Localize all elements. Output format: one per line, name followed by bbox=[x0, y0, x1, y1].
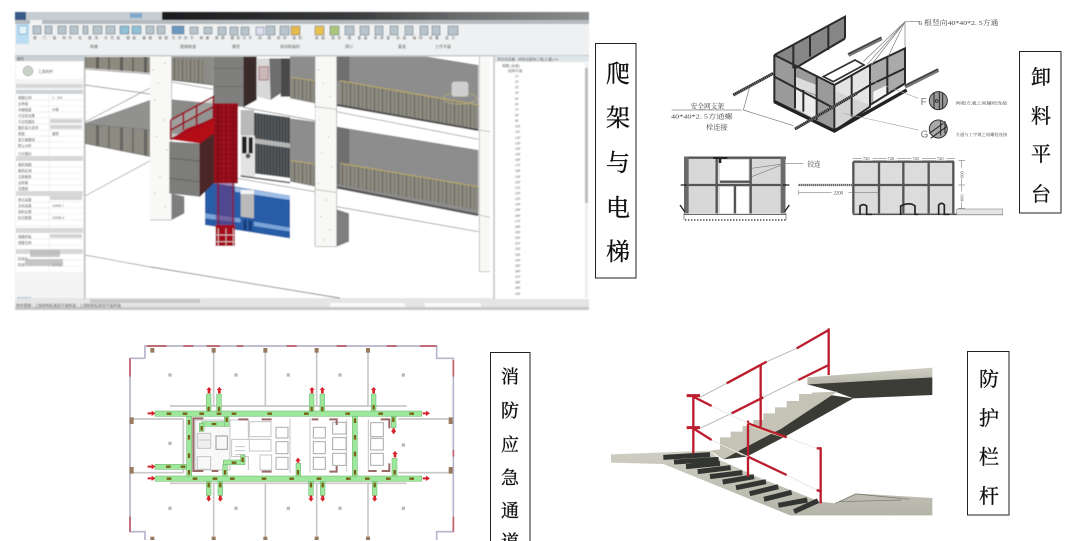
detail G bbox=[843, 113, 1007, 141]
project browser panel: 33F bbox=[515, 253, 521, 257]
room tags bbox=[168, 373, 405, 510]
ribbon toolbar: 房间和面积 bbox=[280, 43, 300, 49]
label: 消防应急通道: 急 bbox=[501, 468, 520, 488]
gray climbing frame box bbox=[169, 142, 199, 197]
project browser panel: 35F bbox=[515, 264, 521, 268]
label: 防护栏杆 bbox=[968, 352, 1009, 515]
label: 爬架与电梯: 架 bbox=[606, 105, 630, 132]
side elevation with dimensions: 720 bbox=[912, 156, 919, 161]
side elevation with dimensions: 600 bbox=[959, 194, 964, 201]
project browser panel: 27F bbox=[515, 219, 521, 223]
properties palette: 裁剪区域 bbox=[18, 168, 32, 173]
ribbon toolbar: 模型 bbox=[232, 43, 240, 49]
project browser panel: 26F bbox=[515, 214, 521, 218]
properties palette: 14990.7 bbox=[52, 204, 64, 208]
label: 卸料平台: 台 bbox=[1031, 183, 1051, 206]
project browser panel: 3F bbox=[515, 86, 519, 90]
properties palette: 视图名称 bbox=[18, 240, 32, 245]
properties palette: 阶段化 bbox=[18, 256, 29, 261]
project browser panel: 28F bbox=[515, 225, 521, 229]
side elevation with dimensions bbox=[799, 156, 1003, 215]
label: 卸料平台: 平 bbox=[1031, 143, 1051, 166]
label: 防护栏杆: 护 bbox=[979, 407, 999, 430]
properties palette: 图形显示选项 bbox=[18, 125, 39, 130]
project browser panel: 20F bbox=[515, 180, 521, 184]
label: 防护栏杆: 防 bbox=[979, 368, 999, 391]
project browser panel: 1F bbox=[515, 74, 519, 78]
red hoist tower bbox=[214, 103, 238, 183]
front elevation: 铰连 bbox=[807, 160, 821, 169]
project browser panel: 5F bbox=[515, 97, 519, 101]
properties palette: 属性帮助 bbox=[17, 296, 32, 301]
status bar bbox=[15, 298, 589, 310]
label: 消防应急通道: 消 bbox=[501, 367, 519, 387]
project browser panel: 29F bbox=[515, 230, 521, 234]
far wall upper bays bbox=[172, 57, 213, 85]
project browser panel: 4F bbox=[515, 91, 519, 95]
left bay walls and railings bbox=[85, 57, 340, 298]
detail G: 方通与工字钢之间螺栓连接 bbox=[956, 131, 1007, 137]
properties palette: 视图比例 bbox=[18, 95, 32, 100]
leader lines bbox=[863, 22, 920, 65]
project browser panel: 22F bbox=[515, 192, 521, 196]
project browser panel: 36F bbox=[515, 270, 521, 274]
detail F bbox=[870, 80, 1007, 110]
label: 爬架与电梯: 与 bbox=[606, 150, 630, 177]
side elevation with dimensions: 720 bbox=[888, 156, 894, 161]
properties palette: 详细程度 bbox=[18, 107, 32, 112]
project browser panel: 37F bbox=[515, 275, 521, 279]
ribbon toolbar: 工作平面 bbox=[435, 43, 451, 49]
label: 防护栏杆: 杆 bbox=[979, 485, 999, 508]
properties palette: 19568.0 bbox=[52, 216, 64, 220]
side elevation with dimensions: 600 bbox=[959, 171, 964, 178]
ribbon toolbar: 洞口 bbox=[345, 43, 353, 49]
detail G: G bbox=[921, 130, 929, 141]
ribbon toolbar: 按面 竖井 墙 垂直 老虎窗 标高 轴网 设置 显示 bbox=[315, 35, 455, 40]
properties palette: 相机位置 bbox=[18, 209, 32, 214]
properties palette: 日光路径 bbox=[18, 151, 32, 156]
project browser panel: 17F bbox=[515, 164, 521, 168]
properties palette: 注释裁剪 bbox=[18, 174, 32, 179]
project browser panel bbox=[493, 56, 589, 299]
properties palette: 规程 bbox=[18, 131, 25, 136]
callout: safety net bracket: 栓连接 bbox=[706, 122, 728, 131]
red exit arrows bbox=[148, 387, 430, 502]
red guard rails bbox=[687, 328, 829, 503]
properties palette: 范围框 bbox=[18, 186, 29, 191]
project browser panel: 40F bbox=[515, 292, 521, 296]
gray shaft and cabin bbox=[213, 57, 243, 107]
properties palette: 属性 bbox=[17, 56, 25, 61]
properties palette: 1 : 100 bbox=[52, 96, 62, 100]
callout: safety net bracket bbox=[671, 102, 742, 131]
properties palette: 目标高度 bbox=[18, 203, 32, 208]
properties palette: 新构造 bbox=[52, 262, 63, 267]
blue translucent lower frame bbox=[205, 182, 290, 238]
ribbon toolbar: 构建 bbox=[90, 43, 98, 49]
label: 爬架与电梯: 爬 bbox=[606, 61, 630, 88]
project browser panel: 结构平面 bbox=[508, 68, 523, 73]
upper landing and stair flight bbox=[710, 368, 932, 459]
project browser panel: 19F bbox=[515, 175, 521, 179]
ribbon toolbar: 楼梯坡道 bbox=[180, 43, 196, 49]
red cage platform bbox=[171, 118, 214, 143]
project browser panel: 38F bbox=[515, 281, 521, 285]
window title bar bbox=[15, 12, 589, 20]
panel: stair guard railing model bbox=[611, 328, 932, 515]
project browser panel: 16F bbox=[515, 158, 521, 162]
isometric platform bbox=[733, 17, 938, 131]
callout: 6 square tubes: 6 根竖向40*40*2. 5方通 bbox=[918, 18, 999, 27]
properties palette: 可见性图形 bbox=[18, 119, 36, 124]
properties palette: 标识数据 bbox=[18, 215, 32, 220]
3D viewport: building model bbox=[84, 56, 494, 299]
label: 爬架与电梯 bbox=[596, 44, 636, 278]
project browser panel: 8F bbox=[515, 114, 519, 118]
detail F: 两根方通之间螺栓连接 bbox=[956, 99, 1007, 105]
building outline bbox=[130, 346, 453, 540]
project browser panel: 30F bbox=[515, 236, 521, 240]
panel: Revit screenshot of climbing frame and elevator bbox=[15, 12, 589, 310]
properties palette: 阶段 bbox=[18, 262, 25, 267]
side elevation with dimensions: 2200 bbox=[834, 192, 844, 197]
project browser panel: 31F bbox=[515, 242, 521, 246]
label: 卸料平台 bbox=[1020, 52, 1061, 213]
properties palette: 视点高度 bbox=[18, 197, 32, 202]
label: 卸料平台: 料 bbox=[1031, 105, 1051, 128]
project browser panel: 32F bbox=[515, 247, 521, 251]
project browser panel: 21F bbox=[515, 186, 521, 190]
columns bbox=[315, 57, 337, 247]
callout: safety net bracket: 40*40*2. 5方通螺 bbox=[671, 112, 734, 121]
ribbon toolbar: 基准 bbox=[398, 43, 406, 49]
project browser panel: 34F bbox=[515, 258, 521, 262]
project browser panel: 15F bbox=[515, 152, 521, 156]
project browser panel: 7F bbox=[515, 108, 519, 112]
project browser panel: 项目浏览器 - 地铁站装饰工程(土建).rvt bbox=[497, 56, 558, 62]
structural columns bbox=[130, 348, 453, 540]
label: 消防应急通道: 应 bbox=[501, 435, 519, 455]
label: 爬架与电梯: 电 bbox=[606, 195, 630, 222]
project browser panel: 23F bbox=[515, 197, 521, 201]
project browser panel: 25F bbox=[515, 208, 521, 212]
label: 爬架与电梯: 梯 bbox=[606, 239, 630, 266]
label: 防护栏杆: 栏 bbox=[979, 446, 999, 469]
panel: unloading platform drawings bbox=[671, 17, 1007, 220]
mid bays bbox=[337, 127, 478, 215]
viewcube bbox=[443, 82, 477, 104]
label: 消防应急通道: 通 bbox=[501, 501, 519, 521]
properties palette: 远剪裁 bbox=[18, 180, 29, 185]
status bar: 构件楼梯 : 上部结构标准层平面构造 : 上部结构标准层平面构造 bbox=[16, 303, 121, 308]
project browser panel: 12F bbox=[515, 136, 521, 140]
project browser panel: 6F bbox=[515, 102, 519, 106]
callout: safety net bracket: 安全网支架 bbox=[691, 102, 724, 111]
panel: fire emergency route floor plan bbox=[130, 346, 453, 540]
project browser panel: 14F bbox=[515, 147, 521, 151]
label: 消防应急通道 bbox=[490, 352, 530, 541]
properties palette: 可见性设置 bbox=[18, 113, 36, 118]
properties palette: 中等 bbox=[52, 107, 59, 112]
brown direction arrows bbox=[166, 405, 414, 487]
elevator core: doors and mesh bbox=[241, 110, 254, 135]
project browser panel: 39F bbox=[515, 286, 521, 290]
side elevation with dimensions: 720 bbox=[863, 156, 869, 161]
properties palette: 工具构件 bbox=[38, 69, 53, 74]
project browser panel: 2F bbox=[515, 80, 519, 84]
project browser panel: 18F bbox=[515, 169, 521, 173]
properties palette: 建筑 bbox=[52, 131, 59, 136]
project browser panel: 13F bbox=[515, 141, 521, 145]
white slabs bbox=[243, 100, 315, 121]
stair treads bbox=[663, 455, 818, 512]
project browser panel: 24F bbox=[515, 203, 521, 207]
ribbon toolbar: 栏杆扶手 坡道 楼梯 模型文字 线 组 房间 面积 bbox=[172, 35, 302, 40]
properties palette bbox=[15, 56, 85, 301]
lower flight and landing bbox=[611, 451, 932, 515]
properties palette: 视图样板 bbox=[18, 234, 32, 239]
ribbon toolbar bbox=[15, 20, 589, 56]
project browser panel: 9F bbox=[515, 119, 519, 123]
green evacuation routes bbox=[155, 394, 422, 495]
properties palette: 裁剪视图 bbox=[18, 162, 32, 167]
detail F: F bbox=[921, 97, 927, 108]
building core bbox=[195, 418, 383, 473]
label: 消防应急通道: 防 bbox=[501, 401, 519, 421]
side elevation with dimensions: 720 bbox=[937, 156, 943, 161]
project browser panel: 视图 (全部) bbox=[502, 63, 520, 68]
properties palette: 比例值 bbox=[18, 101, 29, 106]
properties palette: 默认分析 bbox=[18, 143, 32, 148]
project browser panel: 11F bbox=[515, 130, 520, 134]
ribbon toolbar: 墙 门 窗 构件 柱 屋顶 天花板 楼板 幕墙 竖梃 bbox=[33, 35, 168, 40]
front elevation bbox=[680, 157, 821, 220]
project browser panel: 10F bbox=[515, 125, 521, 129]
label: 卸料平台: 卸 bbox=[1031, 66, 1051, 89]
properties palette: 显示隐藏线 bbox=[18, 137, 36, 142]
